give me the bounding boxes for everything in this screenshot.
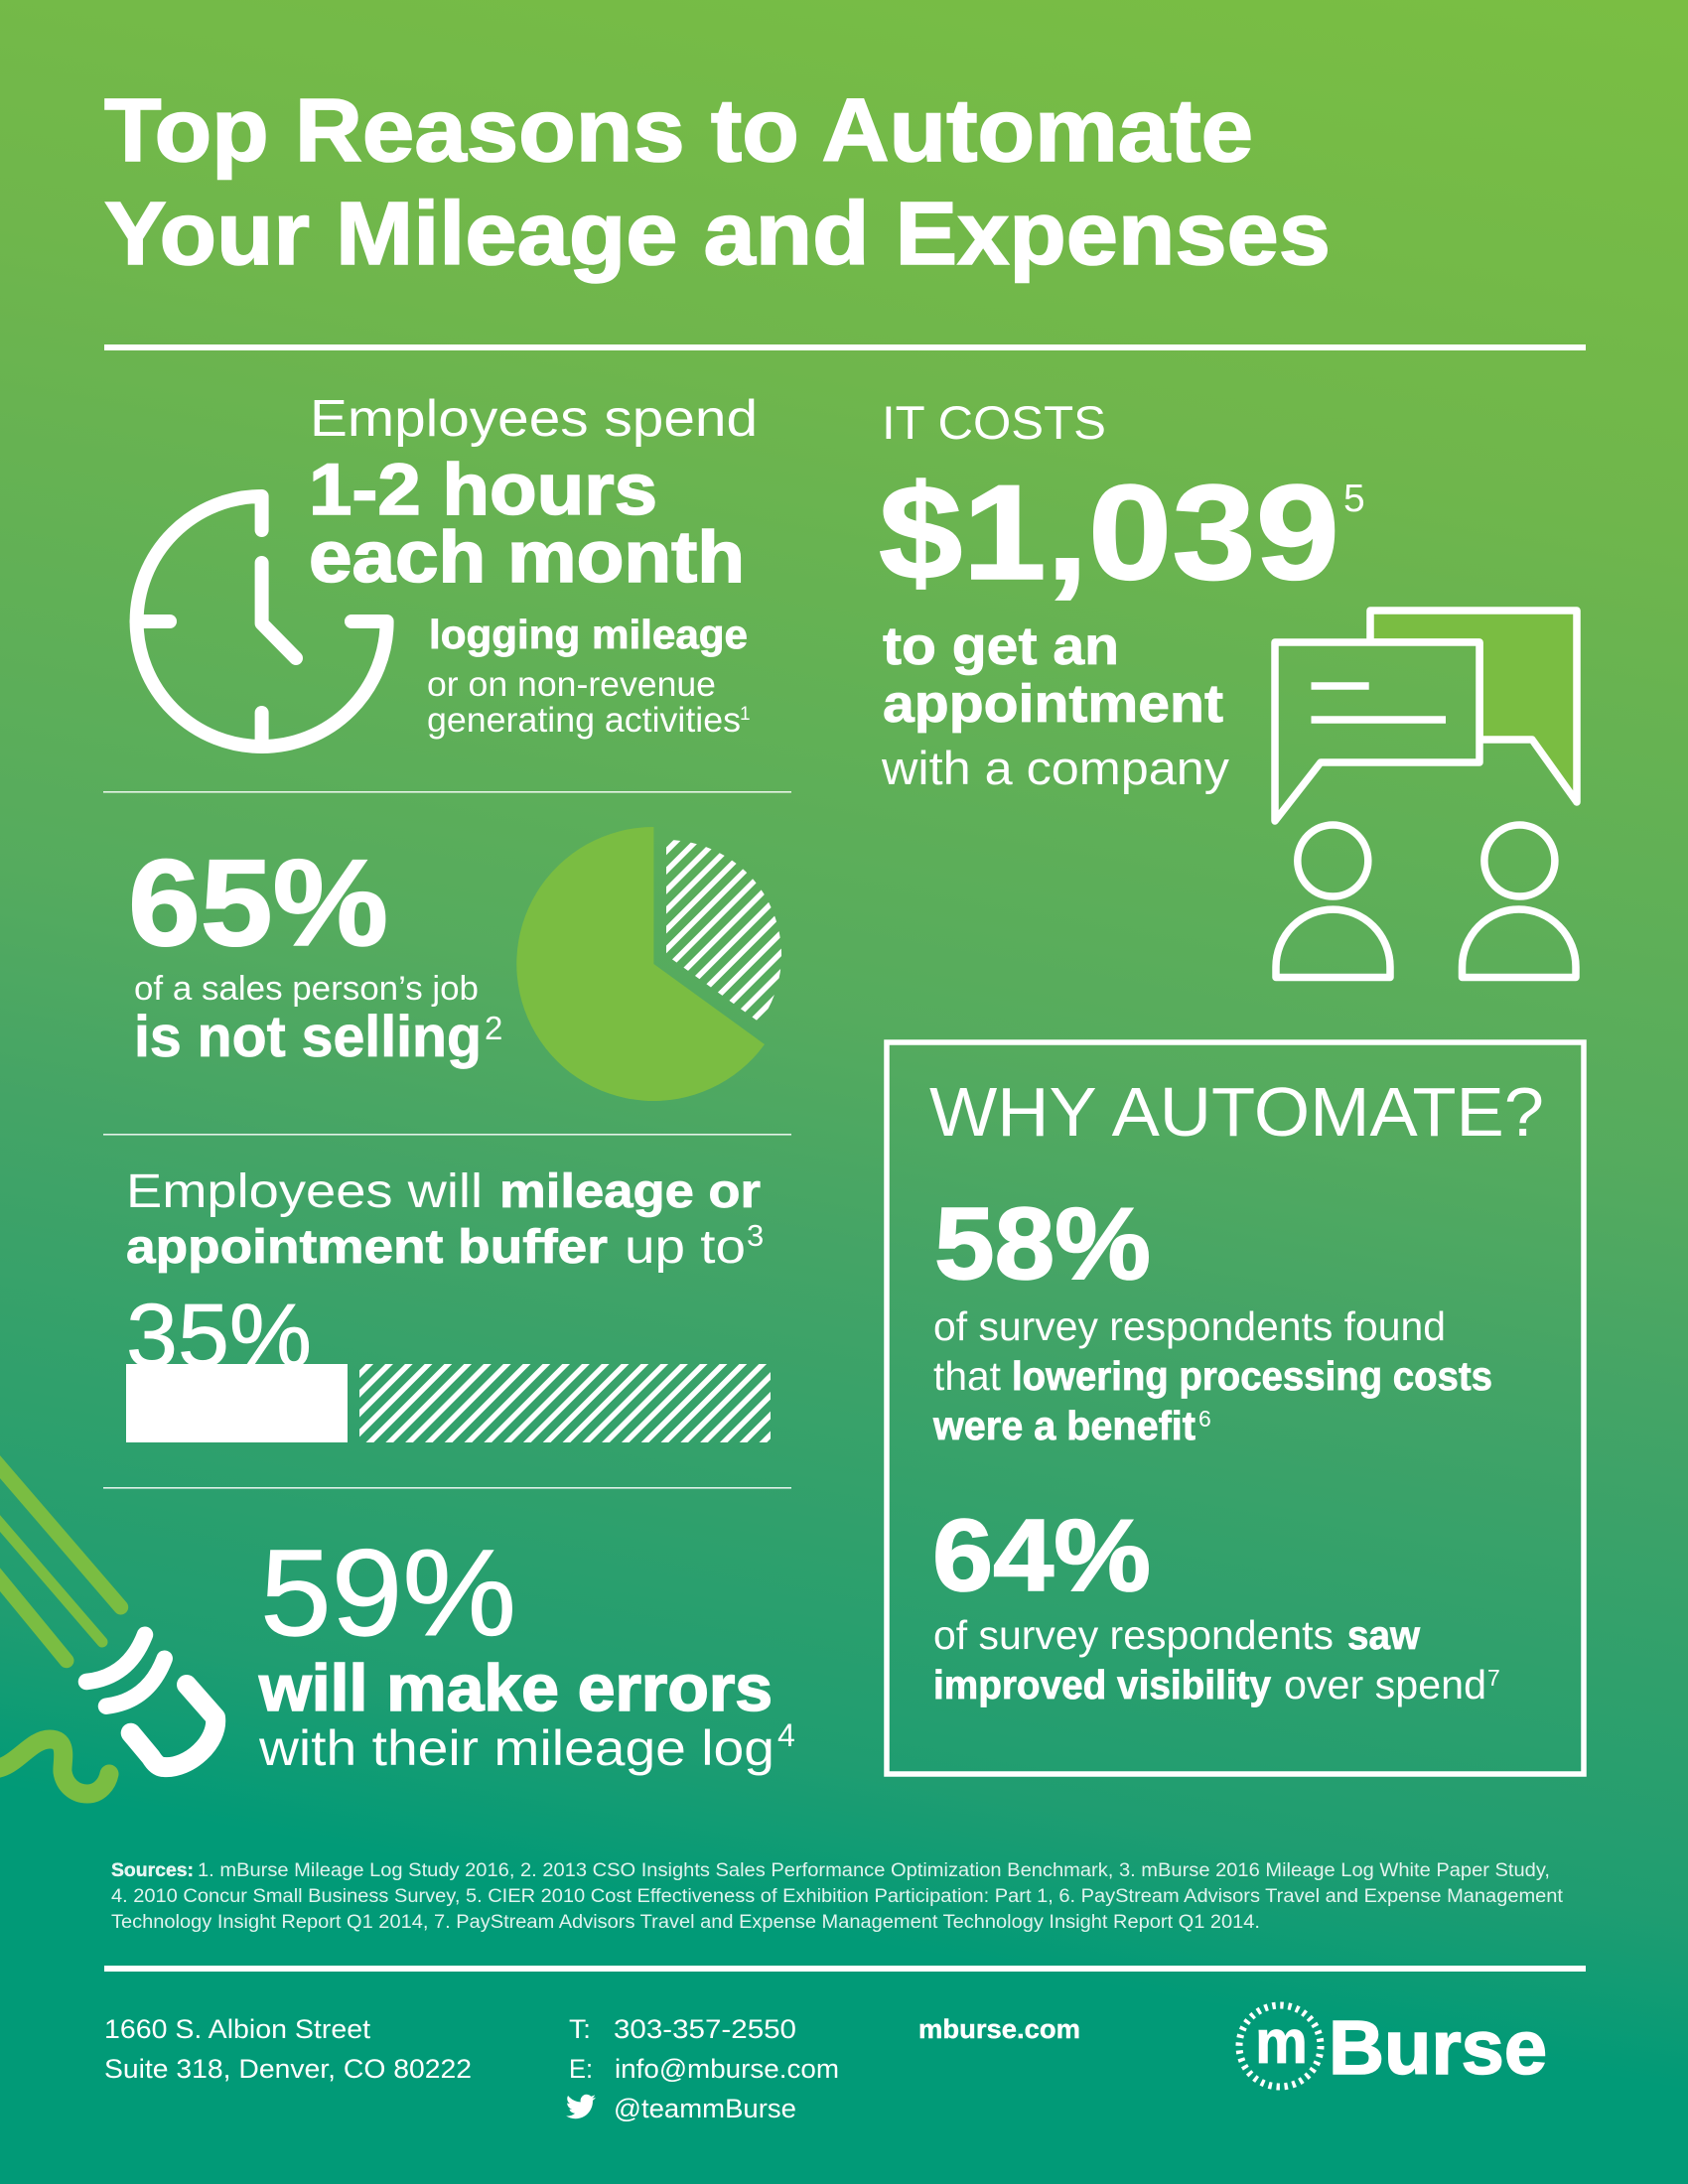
text: employees spend: Employees spend bbox=[310, 390, 758, 448]
icon: twitter bird bbox=[566, 2095, 596, 2118]
panel: it costs $1,039: to get an bbox=[883, 616, 1119, 676]
icon: two people with speech bubbles bbox=[1275, 611, 1577, 977]
stat: 58 percent: 6 bbox=[1198, 1406, 1211, 1432]
panel: 65 percent not selling bbox=[128, 827, 781, 1101]
text: sources: 4. 2010 Concur Small Business Survey, 5. CIER 2010 Cost Effectiveness of Exhibition Participation: Part 1, 6. PayStream Advisors Travel and Expense Management bbox=[111, 1886, 1564, 1907]
stat: 58 percent: of survey respondents found bbox=[933, 1303, 1446, 1349]
text: 35 percent: 35% bbox=[126, 1287, 312, 1386]
text: employees spend bbox=[309, 390, 758, 740]
person right bbox=[1462, 825, 1576, 977]
chart: progress bar bbox=[126, 1364, 771, 1442]
logo: mBurse: Burse bbox=[1329, 2005, 1547, 2091]
text: sources bbox=[111, 1860, 1564, 1933]
heading: why automate: WHY AUTOMATE? bbox=[929, 1073, 1544, 1151]
text: employees spend: 1 bbox=[740, 704, 751, 725]
text: employees spend: or on non-revenue bbox=[427, 665, 716, 704]
panel: it costs $1,039: appointment bbox=[883, 674, 1223, 734]
stat: 64 percent: over spend bbox=[1284, 1662, 1486, 1707]
panel: buffer up to 35 percent bbox=[126, 1165, 771, 1442]
stat: 64 percent: improved visibility bbox=[933, 1662, 1271, 1707]
text: sources: Sources: bbox=[111, 1860, 194, 1881]
panel: why automate bbox=[887, 1042, 1584, 1774]
text: 65 percent: of a sales person’s job bbox=[134, 970, 479, 1008]
footer: address: Suite 318, Denver, CO 80222 bbox=[104, 2054, 472, 2084]
stat: 64 percent bbox=[932, 1498, 1500, 1707]
footer: contact: E: bbox=[569, 2054, 593, 2084]
text: employees spend: each month bbox=[309, 517, 745, 598]
stat: 58 percent: 58% bbox=[934, 1186, 1151, 1300]
panel: it costs $1,039: with a company bbox=[881, 742, 1230, 794]
text: 65 percent: 2 bbox=[485, 1010, 502, 1046]
back speech bubble bbox=[1370, 611, 1577, 802]
person left bbox=[1276, 825, 1390, 977]
text: mileage or appointment buffer: up to bbox=[625, 1221, 746, 1274]
footer: address bbox=[104, 2014, 472, 2084]
title bbox=[104, 81, 1331, 284]
panel: it costs $1,039 bbox=[879, 396, 1365, 794]
panel: it costs $1,039: 5 bbox=[1343, 478, 1365, 520]
front speech bubble bbox=[1275, 642, 1479, 821]
text: mileage or appointment buffer: Employees will bbox=[126, 1165, 483, 1218]
stat: 58 percent: lowering processing costs bbox=[1012, 1353, 1492, 1399]
footer: contact: info@mburse.com bbox=[615, 2054, 839, 2084]
stat: 64 percent: 7 bbox=[1487, 1665, 1500, 1691]
panel: 59 percent errors: 59% bbox=[260, 1525, 516, 1662]
title: Top Reasons to Automate bbox=[104, 81, 1253, 181]
text: employees spend: logging mileage bbox=[429, 612, 748, 657]
panel: 59 percent errors: will make errors bbox=[258, 1651, 773, 1724]
footer: website: mburse.com bbox=[918, 2014, 1080, 2044]
icon: road lines and paperclip decoration bbox=[0, 1455, 215, 1794]
logo: mBurse: m bbox=[1255, 2008, 1308, 2077]
title: Your Mileage and Expenses bbox=[104, 185, 1331, 284]
footer: contact: @teammBurse bbox=[614, 2094, 796, 2123]
text: mileage or appointment buffer: 3 bbox=[747, 1218, 764, 1253]
text: mileage or appointment buffer bbox=[126, 1165, 764, 1274]
text: employees spend: 1-2 hours bbox=[309, 450, 657, 530]
bubble text lines bbox=[1311, 686, 1446, 720]
panel: 59 percent errors bbox=[258, 1525, 795, 1776]
footer: contact: T: bbox=[569, 2014, 591, 2044]
stat: 58 percent: were a benefit bbox=[932, 1403, 1196, 1448]
panel: it costs $1,039: $1,039 bbox=[879, 457, 1339, 608]
chart: pie 65 percent bbox=[516, 827, 781, 1101]
footer: address: 1660 S. Albion Street bbox=[104, 2014, 371, 2044]
panel: employees spend 1-2 hours bbox=[137, 390, 758, 747]
stat: 64 percent: of survey respondents bbox=[933, 1612, 1334, 1658]
panel: 59 percent errors: with their mileage log bbox=[258, 1720, 774, 1776]
stat: 64 percent: 64% bbox=[932, 1498, 1151, 1612]
text: employees spend: generating activities bbox=[427, 701, 741, 740]
stat: 58 percent: that bbox=[933, 1353, 1002, 1399]
stat: 64 percent: saw bbox=[1347, 1612, 1420, 1658]
footer: contact: 303-357-2550 bbox=[614, 2014, 796, 2044]
text: 65 percent bbox=[128, 835, 502, 1069]
text: mileage or appointment buffer: appointment buffer bbox=[126, 1221, 608, 1274]
panel: it costs $1,039: IT COSTS bbox=[882, 396, 1106, 449]
text: 65 percent: is not selling bbox=[134, 1005, 482, 1069]
footer: contact bbox=[566, 2014, 839, 2123]
panel border bbox=[887, 1042, 1584, 1774]
text: 65 percent: 65% bbox=[128, 835, 388, 972]
text: sources: Technology Insight Report Q1 2014, 7. PayStream Advisors Travel and Expense Management Technology Insight Report Q1 2014. bbox=[111, 1912, 1260, 1933]
stat: 58 percent bbox=[932, 1186, 1492, 1448]
icon: clock bbox=[137, 496, 387, 747]
text: sources: 1. mBurse Mileage Log Study 2016, 2. 2013 CSO Insights Sales Performance Optimization Benchmark, 3. mBurse 2016 Mileage Log White Paper Study, bbox=[198, 1860, 1550, 1881]
panel: 59 percent errors: 4 bbox=[777, 1717, 795, 1753]
text: mileage or appointment buffer: mileage or bbox=[499, 1165, 761, 1218]
